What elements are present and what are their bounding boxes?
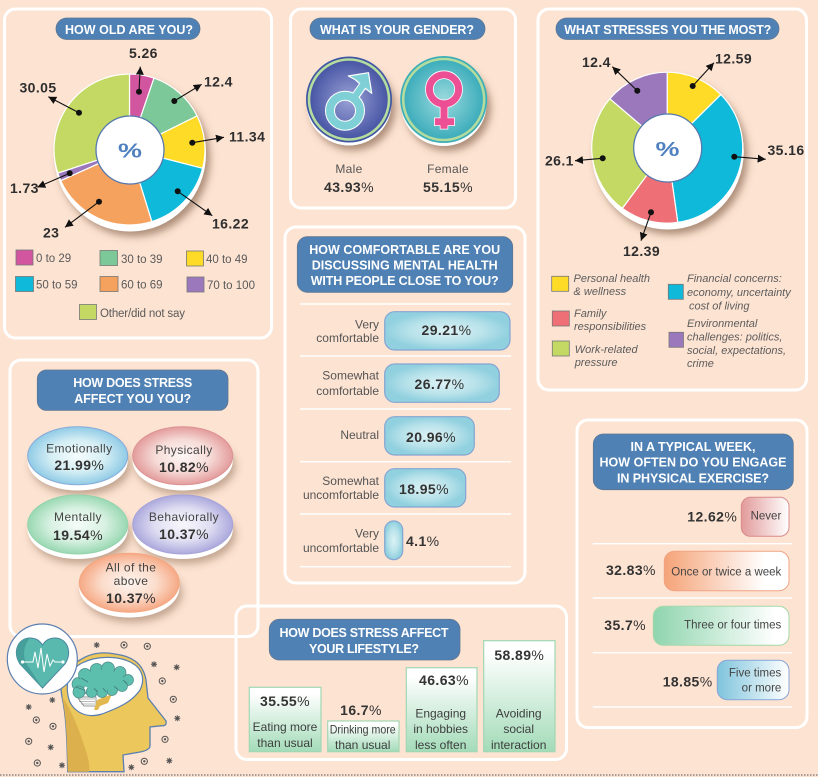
column: engaging in hobbies: 46.63% bbox=[419, 672, 469, 688]
arrows and values: stresses: 12.39 bbox=[623, 243, 660, 259]
bar: once or twice bbox=[606, 551, 789, 591]
column: eating more: than usual bbox=[257, 736, 313, 750]
bubble: behaviorally: Behaviorally bbox=[149, 510, 219, 524]
column: drinking more: than usual bbox=[335, 738, 390, 752]
legend: stresses: challenges: politics, bbox=[687, 332, 782, 344]
bar: three or four: Three or four times bbox=[684, 620, 782, 632]
bar: somewhat uncomfortable: 18.95% bbox=[399, 481, 449, 497]
donut chart: age: % bbox=[118, 140, 142, 162]
legend: stresses: Work-related bbox=[575, 344, 639, 356]
column: drinking more: Drinking more bbox=[330, 722, 396, 736]
panel: lifestyle bbox=[236, 606, 566, 760]
bar: very uncomfortable: Very bbox=[355, 526, 379, 540]
label: male: 43.93% bbox=[324, 179, 374, 195]
label: male: Male bbox=[335, 162, 363, 176]
bubble: mentally bbox=[28, 495, 128, 559]
legend: stresses bbox=[552, 273, 792, 370]
icon: heart with pulse bbox=[7, 624, 77, 694]
panel: how comfortable bbox=[285, 227, 525, 583]
arrows and values: stresses: 35.16 bbox=[768, 142, 805, 158]
arrows and values: age: 16.22 bbox=[212, 216, 249, 232]
heading: stresses: WHAT STRESSES YOU THE MOST? bbox=[564, 23, 771, 37]
bar: somewhat comfortable: 26.77% bbox=[415, 376, 464, 392]
bar: once or twice: Once or twice a week bbox=[671, 566, 782, 578]
arrows and values: stresses: 26.1 bbox=[545, 152, 574, 168]
bubble: all of the above bbox=[79, 553, 179, 618]
heading: exercise: IN A TYPICAL WEEK, bbox=[630, 440, 756, 454]
bar: five times: 18.85% bbox=[663, 674, 713, 690]
donut chart: stresses bbox=[592, 72, 744, 230]
bar: somewhat uncomfortable: uncomfortable bbox=[303, 488, 379, 502]
legend: stresses: Personal health bbox=[574, 273, 650, 285]
arrows and values: age bbox=[10, 45, 265, 240]
heading: exercise: IN PHYSICAL EXERCISE? bbox=[617, 471, 769, 485]
heading: stresses bbox=[556, 18, 779, 40]
column: avoiding social interaction: interaction bbox=[491, 738, 546, 752]
donut chart: stresses: % bbox=[656, 139, 680, 161]
bubble: all of the above: above bbox=[114, 574, 148, 588]
icon: female symbol bbox=[401, 56, 487, 146]
bar: very uncomfortable: 4.1% bbox=[406, 533, 440, 549]
arrows and values: stresses: 12.4 bbox=[582, 54, 611, 70]
bar: very comfortable: 29.21% bbox=[422, 322, 471, 338]
label: female: Female bbox=[427, 162, 469, 176]
legend: stresses: & wellness bbox=[574, 286, 627, 298]
bubble: mentally: 19.54% bbox=[53, 527, 103, 543]
column: eating more bbox=[249, 687, 321, 752]
heading: age bbox=[56, 18, 200, 40]
bar: somewhat uncomfortable: Somewhat bbox=[322, 474, 380, 488]
legend: age bbox=[16, 250, 255, 320]
heading: comfortable: HOW COMFORTABLE ARE YOU bbox=[309, 243, 500, 257]
column: drinking more: 16.7% bbox=[340, 702, 382, 718]
heading: exercise: HOW OFTEN DO YOU ENGAGE bbox=[600, 456, 786, 470]
legend: stresses: Family bbox=[574, 308, 608, 320]
heading: lifestyle: HOW DOES STRESS AFFECT bbox=[280, 626, 449, 640]
bar: somewhat comfortable: Somewhat bbox=[322, 368, 380, 382]
donut chart: age bbox=[54, 74, 206, 232]
bar: never: Never bbox=[751, 511, 781, 523]
bar: neutral: Neutral bbox=[340, 428, 379, 442]
bar: five times: or more bbox=[742, 683, 781, 695]
column: avoiding social interaction: social bbox=[503, 722, 534, 736]
bubble: physically: Physically bbox=[155, 443, 213, 457]
panel: physical exercise bbox=[577, 420, 807, 728]
heading: lifestyle: YOUR LIFESTYLE? bbox=[309, 642, 419, 656]
bubble: emotionally: Emotionally bbox=[46, 442, 113, 456]
bubble: emotionally bbox=[28, 427, 128, 490]
bar: very uncomfortable bbox=[303, 521, 440, 560]
bar: neutral: 20.96% bbox=[406, 429, 456, 445]
legend: age: 40 to 49 bbox=[206, 254, 248, 266]
heading: comfortable: WITH PEOPLE CLOSE TO YOU? bbox=[311, 274, 499, 288]
heading: comfortable: DISCUSSING MENTAL HEALTH bbox=[312, 258, 498, 272]
panel: how does stress affect you bbox=[10, 360, 258, 636]
legend: stresses: cost of living bbox=[689, 300, 750, 312]
legend: age: 70 to 100 bbox=[207, 280, 255, 292]
legend: age: 0 to 29 bbox=[36, 253, 71, 265]
legend: stresses: Financial concerns: bbox=[687, 273, 782, 285]
arrows and values: age: 23 bbox=[43, 224, 59, 240]
bar: once or twice: 32.83% bbox=[606, 562, 656, 578]
bar: neutral bbox=[340, 417, 474, 455]
bar: three or four: 35.7% bbox=[604, 617, 646, 633]
bar: never bbox=[687, 497, 789, 536]
bubble: behaviorally: 10.37% bbox=[159, 526, 209, 542]
bar: three or four bbox=[604, 606, 789, 645]
column: engaging in hobbies: less often bbox=[415, 738, 466, 752]
column: eating more: 35.55% bbox=[260, 693, 310, 709]
heading: exercise bbox=[593, 434, 793, 490]
bar: very comfortable: comfortable bbox=[316, 331, 379, 345]
legend: age: 30 to 39 bbox=[121, 254, 163, 266]
heading: affect you: HOW DOES STRESS bbox=[73, 376, 192, 390]
heading: age: HOW OLD ARE YOU? bbox=[65, 23, 193, 37]
legend: stresses: social, expectations, bbox=[687, 345, 786, 357]
bar: somewhat uncomfortable bbox=[303, 469, 466, 507]
icon: male symbol bbox=[306, 57, 392, 146]
legend: stresses: Environmental bbox=[687, 318, 758, 330]
column: engaging in hobbies: Engaging bbox=[415, 706, 466, 720]
heading: comfortable bbox=[297, 237, 513, 292]
legend: age: 60 to 69 bbox=[121, 280, 163, 292]
illustration: head with brain bbox=[7, 624, 180, 772]
arrows and values: age: 11.34 bbox=[229, 128, 265, 144]
heading: affect you bbox=[37, 370, 228, 410]
heading: lifestyle bbox=[269, 619, 460, 660]
legend: stresses: responsibilities bbox=[574, 321, 647, 333]
arrows and values: age: 5.26 bbox=[129, 45, 158, 61]
bar: five times bbox=[663, 660, 789, 700]
heading: gender: WHAT IS YOUR GENDER? bbox=[320, 23, 474, 37]
bar: very comfortable bbox=[316, 312, 510, 350]
bar: never: 12.62% bbox=[687, 509, 737, 525]
bubble: emotionally: 21.99% bbox=[54, 457, 104, 473]
column: engaging in hobbies: in hobbies bbox=[413, 722, 468, 736]
arrows and values: age: 30.05 bbox=[20, 80, 57, 96]
arrows and values: age: 12.4 bbox=[204, 74, 233, 90]
column: avoiding social interaction bbox=[484, 641, 555, 752]
panel: how old are you bbox=[4, 9, 272, 338]
decorative symbols around head bbox=[26, 642, 180, 770]
panel: what stresses you bbox=[538, 9, 806, 390]
label: female: 55.15% bbox=[423, 179, 473, 195]
column: engaging in hobbies bbox=[406, 668, 477, 752]
heading: affect you: AFFECT YOU YOU? bbox=[74, 392, 191, 406]
column: avoiding social interaction: 58.89% bbox=[494, 647, 544, 663]
bar: very comfortable: Very bbox=[355, 318, 379, 332]
panel: gender bbox=[290, 9, 516, 208]
bubble: physically: 10.82% bbox=[159, 459, 209, 475]
label: female bbox=[423, 162, 473, 195]
legend: stresses: economy, uncertainty bbox=[687, 287, 792, 299]
bar: very uncomfortable: uncomfortable bbox=[303, 541, 379, 555]
bar: somewhat comfortable: comfortable bbox=[316, 384, 379, 398]
bubble: behaviorally bbox=[133, 495, 233, 559]
bubble: all of the above: All of the bbox=[106, 561, 156, 575]
heading: gender bbox=[310, 18, 485, 40]
legend: age: 50 to 59 bbox=[36, 280, 78, 292]
bar: five times: Five times bbox=[729, 668, 782, 680]
bar: somewhat comfortable bbox=[316, 364, 499, 402]
bubble: all of the above: 10.37% bbox=[106, 590, 156, 606]
column: drinking more bbox=[328, 702, 399, 752]
column: eating more: Eating more bbox=[253, 720, 318, 734]
legend: stresses: pressure bbox=[574, 357, 617, 369]
bubble: mentally: Mentally bbox=[54, 510, 102, 524]
column: avoiding social interaction: Avoiding bbox=[496, 706, 542, 720]
arrows and values: stresses: 12.59 bbox=[715, 50, 752, 66]
brain bbox=[72, 662, 134, 710]
legend: age: Other/did not say bbox=[100, 308, 185, 320]
arrows and values: stresses bbox=[545, 50, 805, 259]
bubble: physically bbox=[133, 427, 233, 490]
arrows and values: age: 1.73 bbox=[10, 180, 39, 196]
label: male bbox=[324, 162, 374, 195]
legend: stresses: crime bbox=[687, 358, 714, 370]
